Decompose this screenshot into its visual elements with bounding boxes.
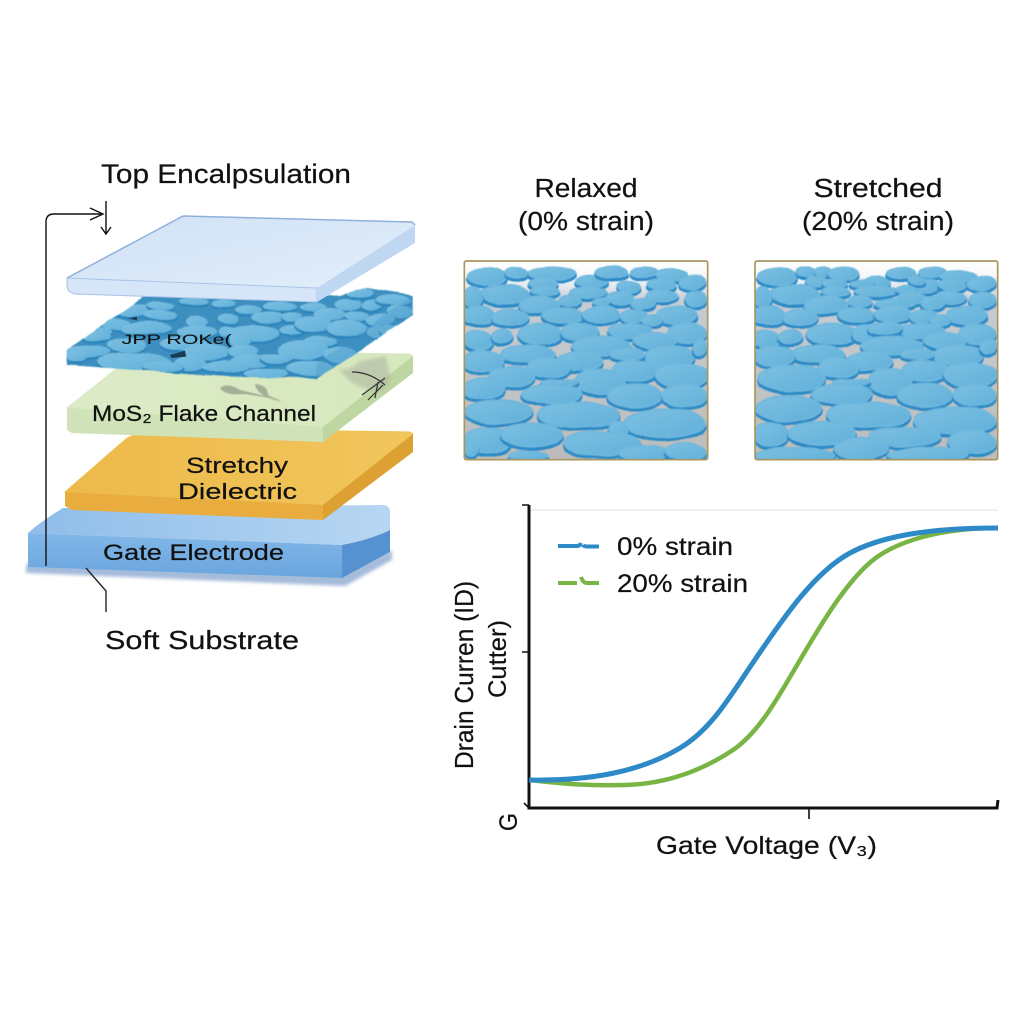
curve: 0% strain (529, 528, 998, 780)
axis label: drain current: Drain Curren (ID) (449, 581, 479, 769)
axis label: origin G: G (495, 813, 523, 831)
chart: transfer curves (522, 505, 998, 819)
legend: 0% strain (558, 533, 733, 561)
label: top encapsulation: Top Encalpsulation (101, 159, 351, 189)
axis label: second line: Cutter) (484, 620, 512, 698)
layer: top encapsulation (67, 216, 415, 302)
legend: 20% strain (558, 570, 748, 598)
heading: relaxed: Relaxed (534, 175, 638, 203)
heading: stretched: Stretched (814, 175, 942, 203)
subheading: stretched strain: (20% strain) (802, 208, 954, 236)
layer: gate electrode and soft substrate (26, 505, 392, 586)
layer: stretchy dielectric (65, 428, 413, 520)
layer: flake film (63, 287, 413, 378)
arrow: soft substrate leader (86, 568, 106, 612)
layer: stretchy dielectric: Dielectric (178, 479, 297, 504)
layer: gate electrode and soft substrate: Gate Electrode (103, 540, 284, 565)
axis label: gate voltage: Gate Voltage (V₃) (656, 832, 877, 860)
legend: 20% strain: 20% strain (617, 570, 748, 598)
layer: stretchy dielectric: Stretchy (186, 453, 289, 478)
legend: 0% strain: 0% strain (617, 533, 733, 561)
arrow: top encapsulation leader (46, 201, 111, 566)
layer: MoS2 flake channel (67, 350, 413, 442)
panel: stretched flakes (752, 261, 998, 462)
subheading: relaxed strain: (0% strain) (518, 208, 654, 236)
layer: flake film: JPP ROKe( (122, 331, 232, 347)
layer: MoS2 flake channel: MoS₂ Flake Channel (92, 401, 316, 426)
curve: 20% strain (529, 528, 998, 785)
label: soft substrate: Soft Substrate (105, 625, 299, 655)
panel: relaxed flakes (462, 261, 708, 461)
